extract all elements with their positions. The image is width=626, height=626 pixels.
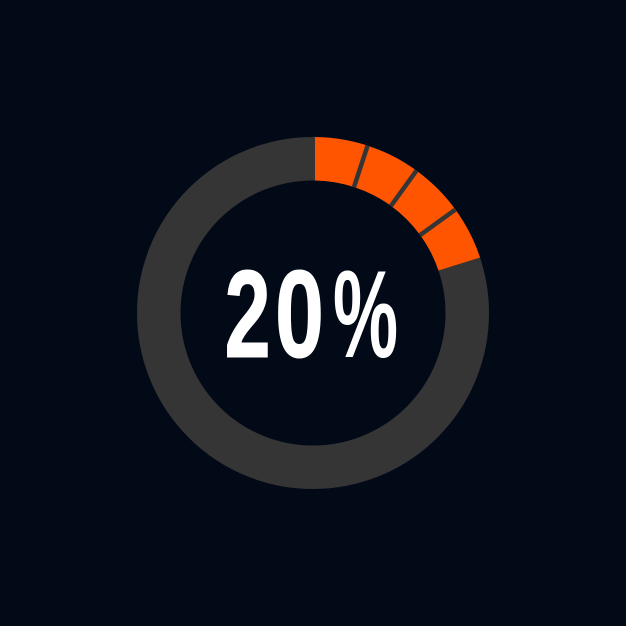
- ring track: [159, 159, 467, 467]
- progress ring: [159, 137, 480, 467]
- percentage label: 2: [224, 245, 271, 384]
- orange progress segment 20 percent: [315, 137, 480, 270]
- percentage label: [224, 245, 398, 384]
- percentage label: 0: [275, 245, 324, 384]
- percentage label: %: [333, 245, 398, 384]
- segment dividers: [354, 146, 455, 235]
